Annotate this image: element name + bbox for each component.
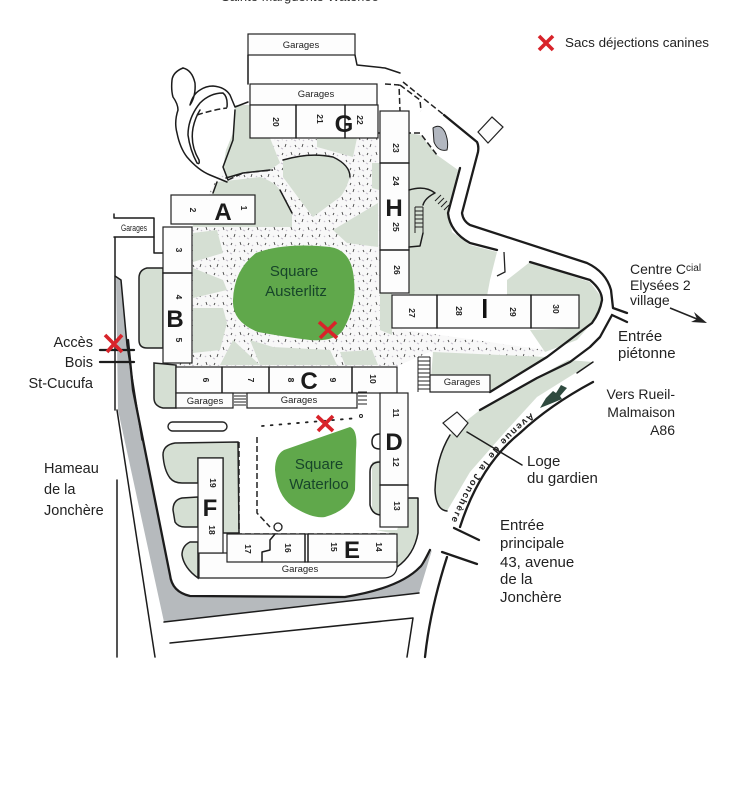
Square Waterloo: Waterloo <box>289 476 349 493</box>
garages and building E: E <box>344 537 360 564</box>
garages and building E: 16 <box>283 543 293 553</box>
Square Waterloo: Square <box>295 456 343 473</box>
label: centre commercial <box>630 261 701 308</box>
garages under C: Garages <box>281 395 317 406</box>
building I: 27 <box>407 308 417 318</box>
road outlines <box>114 55 627 657</box>
Square Waterloo <box>275 427 356 517</box>
building F <box>198 458 223 553</box>
label: centre commercial: village <box>630 292 670 308</box>
building B: 3 <box>174 248 184 253</box>
building H: 24 <box>391 176 401 186</box>
building I: 29 <box>508 307 518 317</box>
garages and building E <box>199 534 397 578</box>
building F: F <box>203 495 217 522</box>
label: centre commercial: Centre C <box>630 261 686 277</box>
label: centre commercial: cial <box>686 263 701 274</box>
triangle junction <box>497 252 505 276</box>
building H: 26 <box>392 265 402 275</box>
arrow: to centre commercial <box>670 308 707 323</box>
loge du gardien: du gardien <box>527 470 598 487</box>
top garages <box>248 34 377 105</box>
east garages <box>430 375 490 392</box>
label: entrée piétonne: Entrée <box>618 328 662 345</box>
building F: 19 <box>208 478 218 488</box>
building I: 28 <box>454 306 464 316</box>
red cross: square Waterloo <box>317 416 333 431</box>
building D <box>380 393 408 527</box>
building G: G <box>335 111 353 138</box>
avenue name: Avenue de la Jonchère <box>452 413 533 522</box>
label: hameau de la Jonchère: Hameau <box>44 461 99 477</box>
pavilion, north-east <box>478 117 503 143</box>
label: vers Rueil-Malmaison: A86 <box>650 422 675 438</box>
building D: D <box>385 429 403 456</box>
lawns west and south <box>139 268 418 578</box>
label: hameau de la Jonchère: de la <box>44 482 76 498</box>
label: accès bois St-Cucufa <box>29 335 94 392</box>
label: entrée principale: de la <box>500 571 533 588</box>
Square Austerlitz: Austerlitz <box>265 283 327 300</box>
building G: 22 <box>355 115 365 125</box>
label: hameau de la Jonchère <box>44 461 104 519</box>
garages and building E: 14 <box>374 542 384 552</box>
building C: 7 <box>246 378 256 383</box>
label: hameau de la Jonchère: Jonchère <box>44 503 104 519</box>
building A: 2 <box>188 208 198 213</box>
building C: 8 <box>286 378 296 383</box>
building H: 25 <box>391 222 401 232</box>
lawns east side <box>380 133 602 392</box>
building A: A <box>214 199 232 226</box>
building H: 23 <box>391 143 401 153</box>
building F: 18 <box>207 525 217 535</box>
garages and building E: 15 <box>329 542 339 552</box>
Square Austerlitz <box>233 245 355 340</box>
stairs <box>234 195 449 405</box>
garages under C: Garages <box>187 396 223 407</box>
label: entrée principale: 43, avenue <box>500 554 574 571</box>
label: entrée piétonne <box>618 328 676 362</box>
red cross: square Austerlitz <box>319 322 337 338</box>
small garages: Garages <box>121 223 147 234</box>
legend: sacs déjections canines: Sacs déjections canines <box>565 36 709 50</box>
access gate lines <box>100 350 134 362</box>
garages and building E: Garages <box>282 564 318 575</box>
building B <box>163 227 192 363</box>
lawns around Square Austerlitz <box>192 105 379 365</box>
lawn along the avenue <box>435 360 593 511</box>
gray service strip <box>116 276 432 622</box>
top garages: Garages <box>283 40 319 51</box>
building G: 21 <box>315 114 325 124</box>
red cross: accès bois <box>105 335 122 352</box>
building G: 20 <box>271 117 281 127</box>
speckled footpaths <box>176 138 545 372</box>
label: vers Rueil-Malmaison: Malmaison <box>607 404 675 420</box>
building D: 12 <box>391 457 401 467</box>
label: accès bois St-Cucufa: Accès <box>54 335 93 351</box>
label: entrée piétonne: piétonne <box>618 345 676 362</box>
label: accès bois St-Cucufa: St-Cucufa <box>29 376 94 392</box>
label: entrée principale: Entrée <box>500 517 544 534</box>
label: entrée principale: principale <box>500 535 564 552</box>
label: vers Rueil-Malmaison <box>607 386 675 438</box>
top garages: Garages <box>298 89 334 100</box>
building C: C <box>300 368 318 395</box>
building I: 30 <box>551 304 561 314</box>
building G <box>250 105 378 138</box>
building D: 13 <box>392 501 402 511</box>
loge du gardien: Loge <box>527 453 560 470</box>
label: accès bois St-Cucufa: Bois <box>65 355 93 371</box>
building C <box>176 367 397 395</box>
label: entrée principale <box>500 517 574 606</box>
building C: 9 <box>328 378 338 383</box>
east garages: Garages <box>444 377 480 388</box>
building A <box>171 195 255 226</box>
building B: B <box>166 306 184 333</box>
building B: 4 <box>174 295 184 300</box>
building D: 11 <box>391 408 401 418</box>
building H: H <box>385 195 403 222</box>
Square Austerlitz: Square <box>270 263 318 280</box>
pond-side path, east <box>409 188 435 247</box>
garages under C <box>176 393 357 408</box>
pond and winding paths, north-west <box>172 68 273 193</box>
small garages <box>114 214 154 237</box>
building C: 10 <box>368 374 378 384</box>
building A: 1 <box>239 206 249 211</box>
label: entrée principale: Jonchère <box>500 589 562 606</box>
building I <box>392 295 579 328</box>
building H <box>380 111 409 293</box>
pond, north-east <box>433 126 448 150</box>
building C: 6 <box>201 378 211 383</box>
loge du gardien <box>443 412 598 487</box>
building B: 5 <box>174 338 184 343</box>
garages and building E: 17 <box>243 544 253 554</box>
label: centre commercial: Elysées 2 <box>630 277 691 293</box>
arrow: direction of avenue <box>540 385 567 408</box>
label: vers Rueil-Malmaison: Vers Rueil- <box>607 386 675 402</box>
